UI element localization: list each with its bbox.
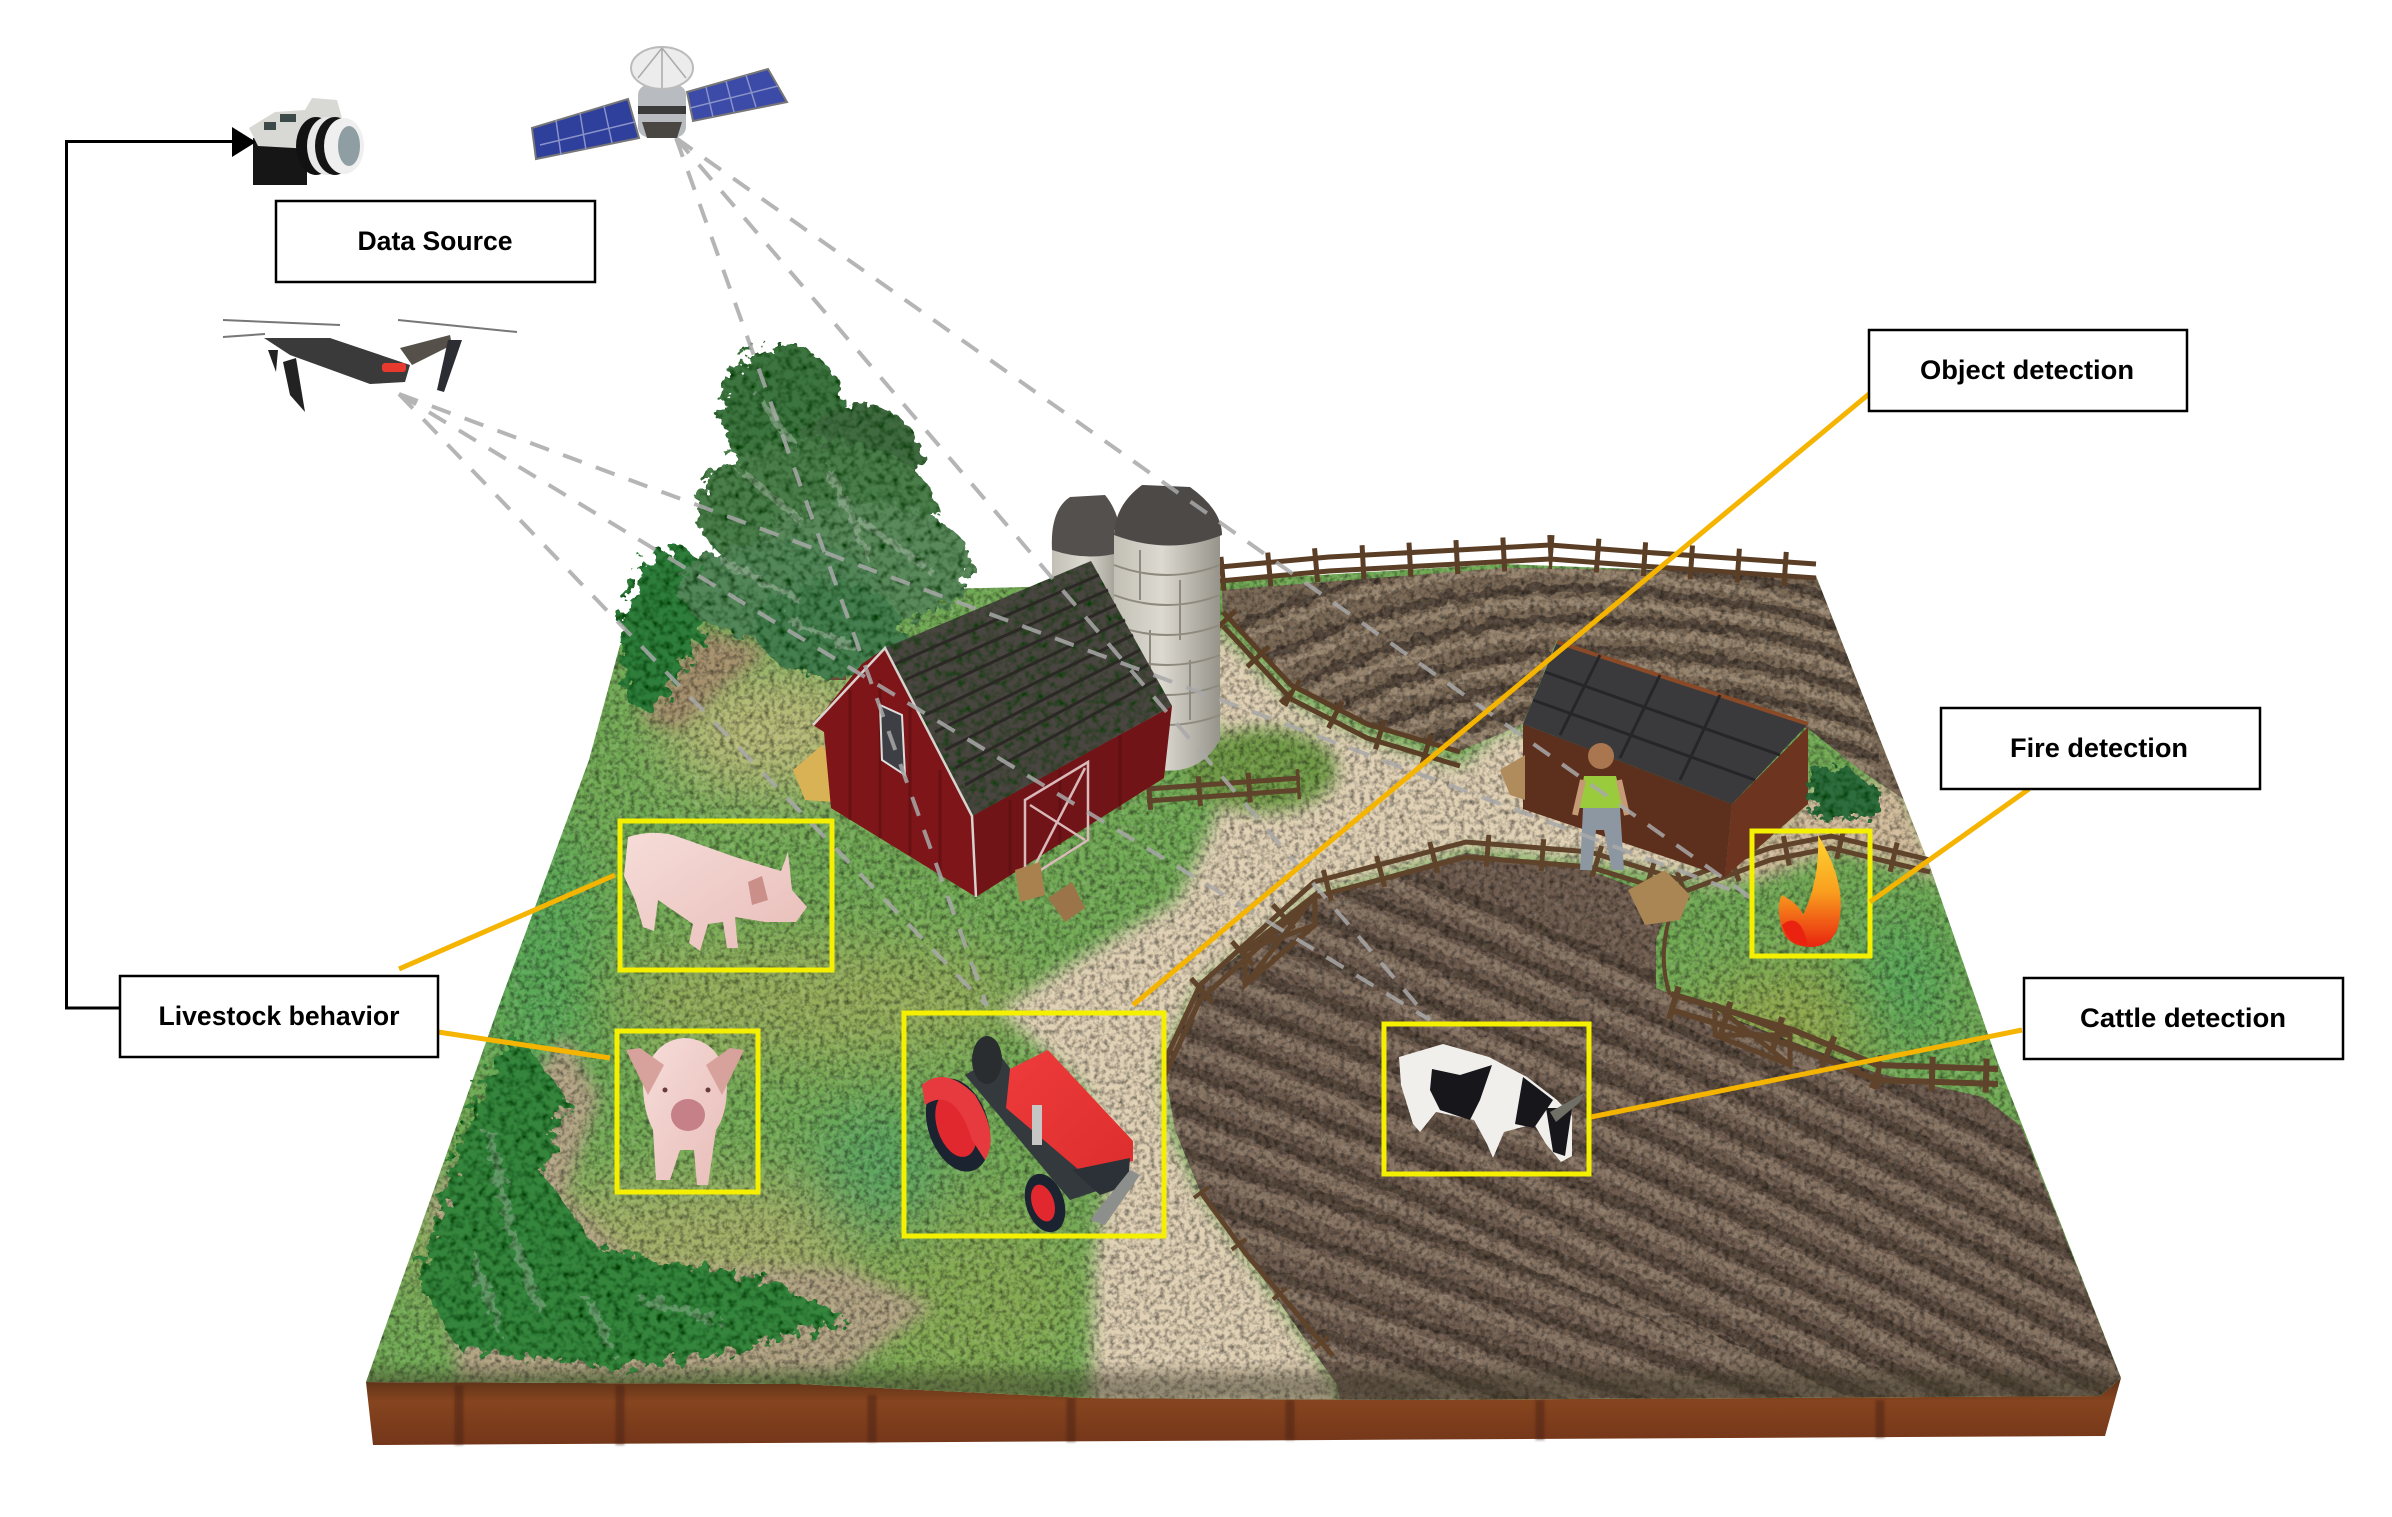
box: upper pig [620,821,832,970]
gate in fire zone fence [1715,1005,1790,1065]
label: Fire detection: Fire detection [2010,733,2188,763]
cow ear [1550,1093,1584,1122]
farmer shirt [1578,776,1624,808]
furrow ridges [1166,878,2120,1400]
black connector from Livestock behavior to camera [66,142,236,1008]
dirt right of shed [1700,780,1945,880]
front silo [1114,485,1222,771]
green patch by silo [1187,728,1337,812]
rear silo [1052,495,1124,710]
label: Fire detection [1941,708,2260,789]
shed front wall [1523,724,1732,877]
barn front wall [813,648,976,897]
barn [813,561,1172,897]
shed roof [1523,642,1808,804]
label: Data Source: Data Source [358,226,512,256]
tractor seat [972,1036,1002,1084]
soil seams [459,1385,1880,1445]
furrow ridges [1215,571,1880,774]
furrow shadows [1215,557,1880,760]
dirt under tree [640,630,770,730]
flame [1779,835,1841,947]
pig eyes [662,1088,668,1092]
soil front face [366,1378,2121,1445]
icon: satellite [532,47,787,159]
shed [1523,642,1808,877]
small fence by barn [1147,778,1300,801]
box: tractor [904,1013,1164,1236]
dirt yard and track [1000,620,1730,1410]
tree foliage [680,345,972,678]
box: fire [1752,831,1870,956]
hedge pale leaves [470,1130,720,1350]
hay bales [793,745,840,802]
arrowhead into camera [232,127,256,157]
box: cow [1384,1024,1589,1174]
gray dashed sensing lines [399,138,1750,1020]
grass colour patches [400,665,1950,1390]
farmer figure [1575,743,1627,870]
barn window [880,705,905,775]
gate in lower field fence [1245,895,1315,985]
crates by shed [1500,755,1690,925]
lower ploughed field [1166,853,2121,1400]
cow [1399,1044,1584,1162]
hedge lower left [417,1038,849,1368]
label: Cattle detection: Cattle detection [2080,1003,2286,1033]
bush right of shed [1810,765,1885,820]
tractor front wheel [1018,1169,1072,1237]
front edge shadow [350,1372,2150,1404]
tractor grille [1072,1158,1130,1195]
cow body [1399,1044,1572,1162]
icon: camera [249,98,364,185]
tractor rear hub [928,1088,984,1162]
orange leader lines [399,394,2029,1117]
shed side wall [1725,727,1808,877]
icon: drone [223,320,517,412]
barn roof [885,561,1172,816]
label: Object detection [1869,330,2187,411]
panel: farm terrain block [366,564,2121,1447]
furrow shadows [1166,869,2114,1399]
pig in upper box [624,833,807,951]
tractor fender [922,1077,991,1160]
terrain top surface [366,564,2121,1400]
pig in lower box [626,1038,744,1185]
solar panel grid [540,75,778,155]
yellow detection boxes [617,821,1870,1236]
grass base [350,560,2150,1420]
tractor [915,1036,1140,1237]
texture grain light [350,560,2150,1420]
tractor front hub [1027,1182,1059,1224]
box: lower pig [617,1031,758,1192]
crates by barn [1015,862,1085,922]
tractor hood [1006,1050,1133,1170]
tractor exhaust [1032,1105,1042,1145]
farmer jeans [1580,808,1624,870]
front silo cap [1114,485,1222,546]
tree [680,345,972,680]
barn trim [813,648,976,897]
label: Object detection: Object detection [1920,355,2134,385]
fence by fire zone [1664,836,1998,1084]
barn right wall [972,706,1172,897]
texture grain dark [350,560,2150,1420]
label: Data Source [276,201,595,282]
cow black patches [1430,1065,1572,1156]
barn door [1025,762,1088,880]
shed roof tile lines [1533,655,1780,780]
bush left of tree [620,545,712,712]
shed roof ridge [1557,642,1808,724]
silo block lines [1114,550,1220,725]
label: Livestock behavior: Livestock behavior [158,1001,400,1031]
fence around lower field [1165,842,1680,1356]
farmer arms [1575,780,1627,815]
label: Livestock behavior [120,976,438,1057]
tractor rear wheel [915,1070,1001,1180]
back fence [1220,545,1816,581]
rear silo cap [1052,495,1122,557]
farmer head [1588,743,1614,769]
tree trunk [825,590,846,680]
dirt around hedge [430,1035,934,1380]
tractor chassis [965,1055,1100,1200]
label: Cattle detection [2024,978,2343,1059]
fence along upper field [1223,612,1460,766]
tractor bumper [1090,1170,1140,1225]
roof shingle lines [895,575,1156,785]
barn wall planks [850,680,1120,876]
upper ploughed field [1222,568,1904,799]
